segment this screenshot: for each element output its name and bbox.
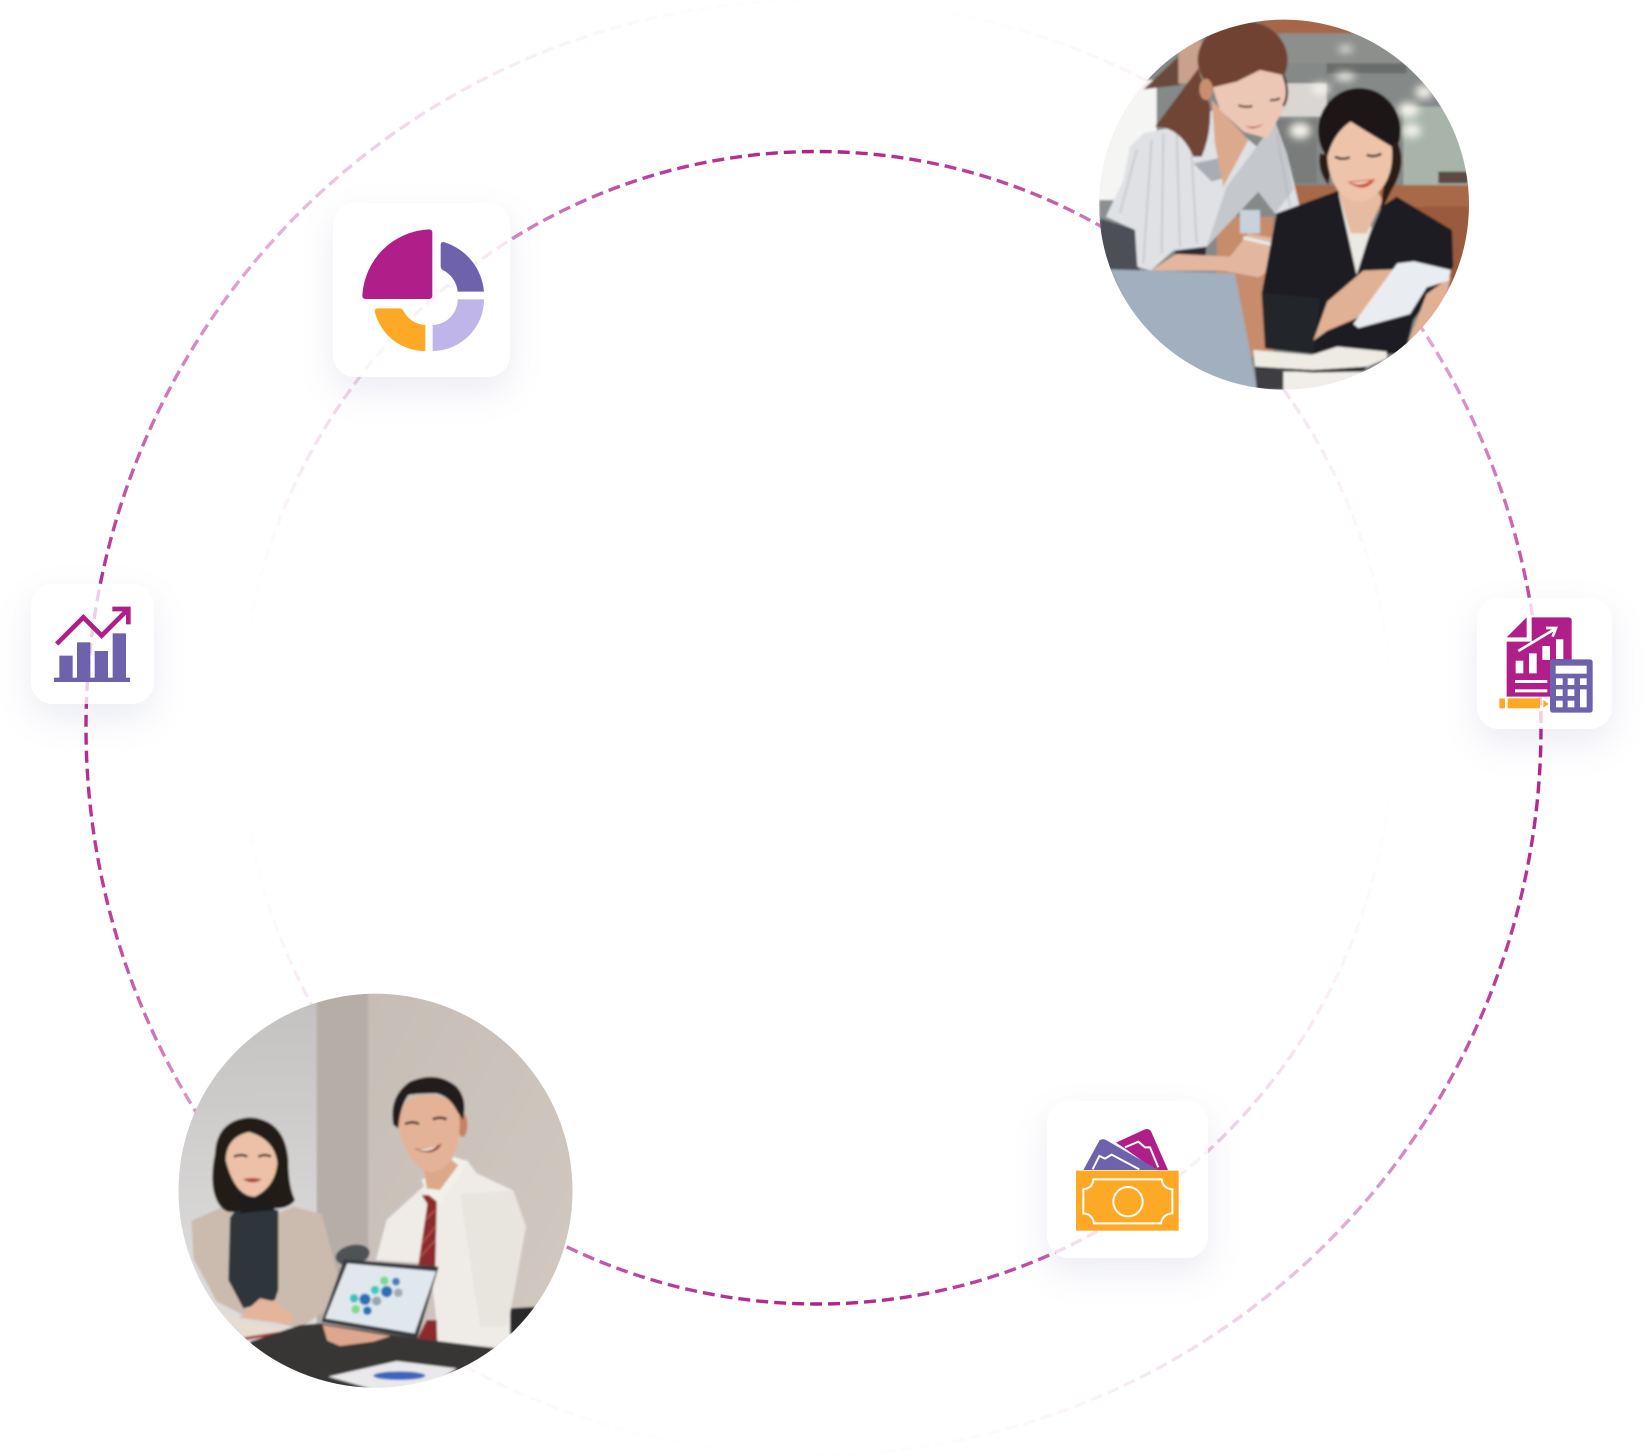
laptop	[1110, 269, 1257, 390]
icon: stack of banknotes	[1076, 1129, 1179, 1231]
icon card: rising bar chart	[31, 584, 154, 704]
tablet	[321, 1259, 439, 1339]
photo: two colleagues presenting a tablet	[178, 994, 572, 1388]
man	[376, 1160, 526, 1348]
icon card: financial report and calculator	[1477, 598, 1612, 729]
table	[249, 1322, 495, 1388]
icon card: banknotes	[1047, 1101, 1208, 1258]
woman	[192, 1207, 337, 1328]
left woman	[1100, 218, 1139, 272]
icon card: pie chart	[333, 203, 510, 377]
icon: bar chart with rising arrow	[54, 606, 131, 682]
inner dashed ring	[241, 152, 1393, 1304]
icon: segmented pie chart	[362, 229, 484, 351]
right woman	[1262, 191, 1453, 354]
photo: two colleagues reviewing documents	[1099, 20, 1469, 390]
icon: report with calculator and pencil	[1499, 617, 1593, 713]
